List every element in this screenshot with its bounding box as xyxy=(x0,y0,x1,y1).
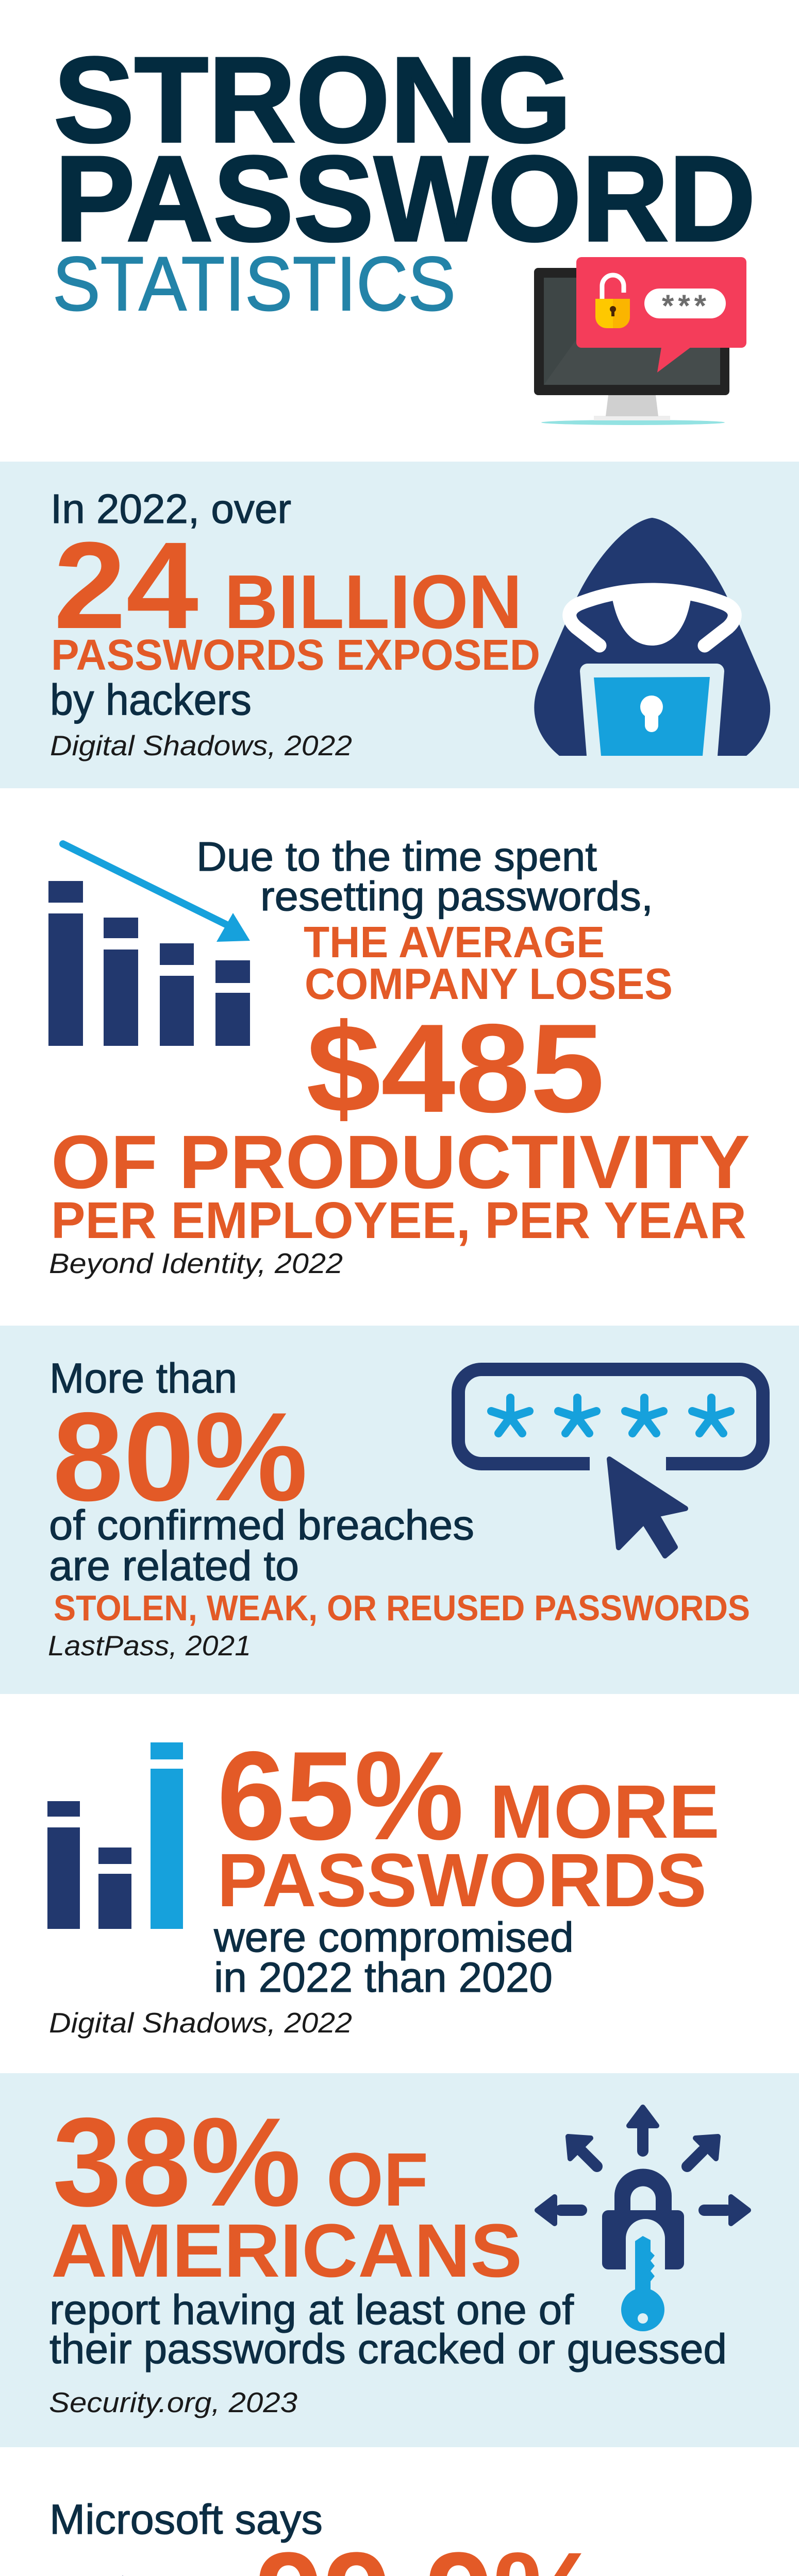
stat word: MORE: MORE xyxy=(490,1770,720,1854)
stat: THE AVERAGE: THE AVERAGE xyxy=(304,918,605,967)
stat: 24: 24 xyxy=(54,516,198,654)
text: were compromised: were compromised xyxy=(213,1914,574,1961)
stat: PASSWORDS: PASSWORDS xyxy=(217,1838,707,1923)
panel: 65% more passwords xyxy=(47,1725,720,2039)
stat word: BILLION: BILLION xyxy=(224,560,522,645)
text: by hackers: by hackers xyxy=(50,675,252,724)
text: Due to the time spent: Due to the time spent xyxy=(196,834,597,879)
text: are related to: are related to xyxy=(49,1543,299,1589)
panel: 38% of Americans xyxy=(0,2073,799,2447)
source: LastPass, 2021 xyxy=(48,1630,251,1662)
text: More than: More than xyxy=(49,1355,237,1402)
stat word: OF: OF xyxy=(326,2138,428,2222)
icon: lock with key and arrows xyxy=(537,2107,748,2331)
stat: AMERICANS: AMERICANS xyxy=(51,2209,522,2293)
icon: hooded hacker with laptop xyxy=(534,518,770,756)
subtitle: STATISTICS: STATISTICS xyxy=(53,241,456,327)
source: Beyond Identity, 2022 xyxy=(49,1247,343,1279)
panel: $485 productivity loss xyxy=(48,834,750,1279)
text: of confirmed breaches: of confirmed breaches xyxy=(49,1502,474,1549)
text: their passwords cracked or guessed: their passwords cracked or guessed xyxy=(49,2326,727,2372)
icon: monitor with password alert xyxy=(534,257,746,425)
stat: PER EMPLOYEE, PER YEAR: PER EMPLOYEE, PER YEAR xyxy=(51,1192,746,1249)
icon: monitor with password alert: *** xyxy=(662,289,710,323)
stat: 65%: 65% xyxy=(217,1725,464,1866)
source: Digital Shadows, 2022 xyxy=(50,730,352,761)
icon: rising bar chart xyxy=(47,1742,183,1929)
source: Security.org, 2023 xyxy=(49,2386,297,2418)
stat: COMPANY LOSES: COMPANY LOSES xyxy=(305,960,673,1009)
stat: $485: $485 xyxy=(306,997,605,1139)
text: in 2022 than 2020: in 2022 than 2020 xyxy=(214,1954,553,2001)
icon: declining bar chart with arrow xyxy=(48,844,250,1046)
stat: 80%: 80% xyxy=(53,1386,308,1527)
title: PASSWORD: PASSWORD xyxy=(55,131,756,267)
panel: 99.9% password-based threats xyxy=(24,2496,731,2576)
stat: STOLEN, WEAK, OR REUSED PASSWORDS: STOLEN, WEAK, OR REUSED PASSWORDS xyxy=(54,1588,750,1628)
stat: OF PRODUCTIVITY: OF PRODUCTIVITY xyxy=(51,1120,750,1205)
text: In 2022, over: In 2022, over xyxy=(51,486,291,532)
text: report having at least one of: report having at least one of xyxy=(49,2286,574,2333)
source: Digital Shadows, 2022 xyxy=(49,2007,352,2039)
panel: 24 billion passwords exposed xyxy=(0,462,799,788)
icon: shield with padlock xyxy=(24,2575,222,2576)
panel: 80% of breaches xyxy=(0,1326,799,1694)
icon: password field with cursor xyxy=(458,1369,763,1556)
text: Microsoft says: Microsoft says xyxy=(49,2496,323,2543)
stat: PASSWORDS EXPOSED: PASSWORDS EXPOSED xyxy=(51,631,540,679)
stat: 38%: 38% xyxy=(53,2091,301,2232)
title: STRONG: STRONG xyxy=(54,32,572,168)
header panel xyxy=(53,32,756,425)
text: resetting passwords: resetting passwords, xyxy=(260,873,653,919)
